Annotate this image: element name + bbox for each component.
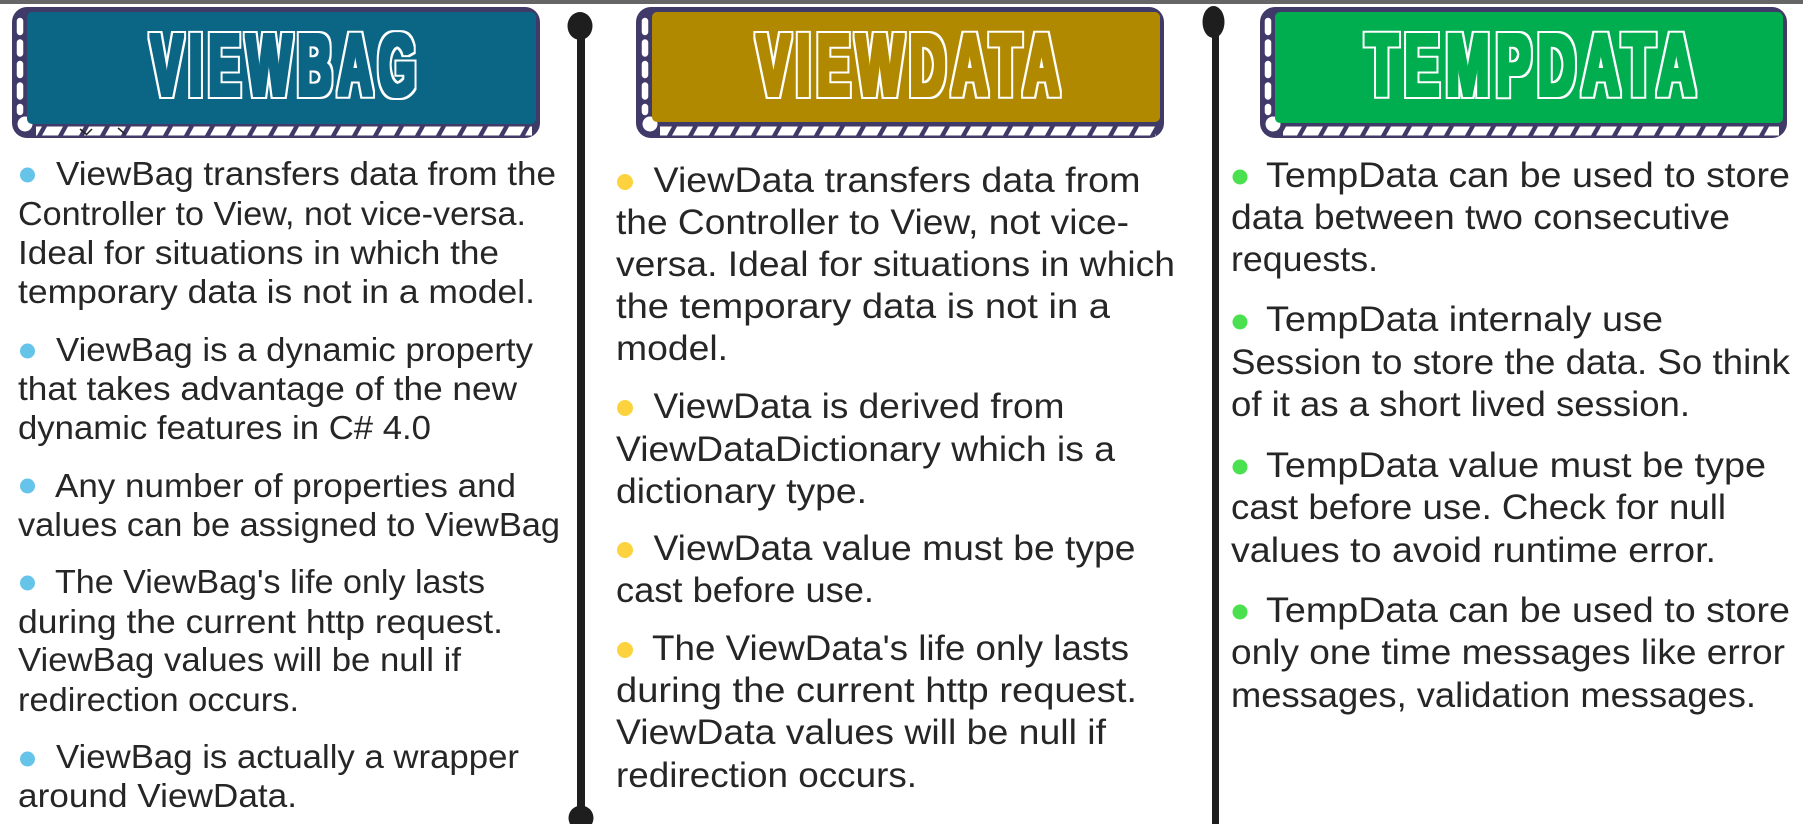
panel: ViewBag bbox=[12, 7, 560, 814]
bullet: session: of it as a short lived session. bbox=[1231, 385, 1690, 424]
panel: TempData bbox=[1231, 7, 1791, 715]
bullet: life only lasts: during the current http request. bbox=[18, 603, 503, 640]
bullet: any number of properties: Any number of properties and bbox=[55, 467, 516, 504]
bullet: consecutive requests: data between two consecutive bbox=[1231, 198, 1730, 237]
bullet: transfers data: versa. Ideal for situations in which bbox=[616, 245, 1175, 284]
bullet: session: TempData internaly use bbox=[1266, 300, 1663, 339]
divider: left bbox=[568, 12, 594, 824]
bullet: one time messages: TempData can be used to store bbox=[1266, 591, 1790, 630]
bullet: transfers data: Controller to View, not vice-versa. bbox=[18, 195, 526, 232]
bullet: transfers data: ViewData transfers data from bbox=[654, 161, 1140, 200]
bullet: one time messages: only one time messages like error bbox=[1231, 633, 1785, 672]
bullet: life only lasts: ViewData values will be null if bbox=[616, 713, 1106, 752]
bullet: type cast bbox=[616, 529, 1136, 610]
bullet: consecutive requests: TempData can be used to store bbox=[1266, 156, 1790, 195]
bullet: session: Session to store the data. So think bbox=[1231, 343, 1791, 382]
bullet: any number of properties bbox=[18, 467, 560, 543]
bullet: life only lasts: ViewBag values will be null if bbox=[18, 641, 462, 678]
bullet: consecutive requests: requests. bbox=[1231, 240, 1378, 279]
bullet: transfers data bbox=[18, 155, 556, 310]
bullet: wrapper: around ViewData. bbox=[18, 777, 297, 814]
heading: ViewData banner bbox=[636, 7, 1164, 138]
bullet: derived from dictionary: ViewData is derived from bbox=[654, 387, 1064, 426]
bullet: any number of properties: values can be assigned to ViewBag bbox=[18, 506, 560, 543]
bullet: transfers data: temporary data is not in a model. bbox=[18, 273, 535, 310]
bullet: transfers data: ViewBag transfers data from the bbox=[56, 155, 556, 192]
top bar bbox=[0, 0, 1803, 4]
bullet: derived from dictionary: dictionary type. bbox=[616, 472, 867, 511]
bullet: dynamic property: dynamic features in C# 4.0 bbox=[18, 409, 431, 446]
heading: ViewData banner: VIEWDATA bbox=[757, 17, 1066, 114]
bullet: dynamic property: that takes advantage of the new bbox=[18, 370, 517, 407]
bullet: derived from dictionary bbox=[616, 387, 1116, 511]
bullet: life only lasts: during the current http request. bbox=[616, 671, 1137, 710]
bullet: session bbox=[1231, 300, 1791, 424]
bullet: type cast: cast before use. Check for null bbox=[1231, 488, 1726, 527]
bullet: life only lasts: The ViewBag's life only lasts bbox=[55, 563, 485, 600]
bullet: transfers data: the temporary data is not in a bbox=[616, 287, 1111, 326]
bullet: life only lasts: redirection occurs. bbox=[616, 756, 917, 795]
bullet: one time messages bbox=[1231, 591, 1790, 715]
bullet: life only lasts: The ViewData's life only lasts bbox=[652, 629, 1129, 668]
bullet: transfers data: model. bbox=[616, 329, 728, 368]
divider: right bbox=[1202, 6, 1224, 824]
bullet: type cast: values to avoid runtime error. bbox=[1231, 531, 1716, 570]
bullet: wrapper bbox=[18, 738, 519, 814]
heading: TempData banner bbox=[1260, 7, 1787, 138]
bullet: type cast bbox=[1231, 446, 1766, 570]
bullet: consecutive requests bbox=[1231, 156, 1790, 279]
bullet: dynamic property bbox=[18, 331, 534, 446]
heading: ViewBag banner: VIEWBAG bbox=[151, 17, 422, 114]
heading: ViewBag banner bbox=[12, 7, 540, 138]
bullet: transfers data: Ideal for situations in which the bbox=[18, 234, 499, 271]
bullet: type cast: cast before use. bbox=[616, 571, 874, 610]
bullet: transfers data bbox=[616, 161, 1175, 368]
panel: ViewData bbox=[616, 7, 1175, 795]
bullet: one time messages: messages, validation messages. bbox=[1231, 676, 1756, 715]
bullet: life only lasts bbox=[18, 563, 503, 718]
bullet: type cast: TempData value must be type bbox=[1266, 446, 1766, 485]
bullet: life only lasts bbox=[616, 629, 1137, 795]
bullet: type cast: ViewData value must be type bbox=[654, 529, 1136, 568]
bullet: dynamic property: ViewBag is a dynamic property bbox=[56, 331, 534, 368]
bullet: wrapper: ViewBag is actually a wrapper bbox=[56, 738, 519, 775]
bullet: transfers data: the Controller to View, not vice- bbox=[616, 203, 1129, 242]
bullet: derived from dictionary: ViewDataDictionary which is a bbox=[616, 430, 1116, 469]
bullet: life only lasts: redirection occurs. bbox=[18, 681, 299, 718]
